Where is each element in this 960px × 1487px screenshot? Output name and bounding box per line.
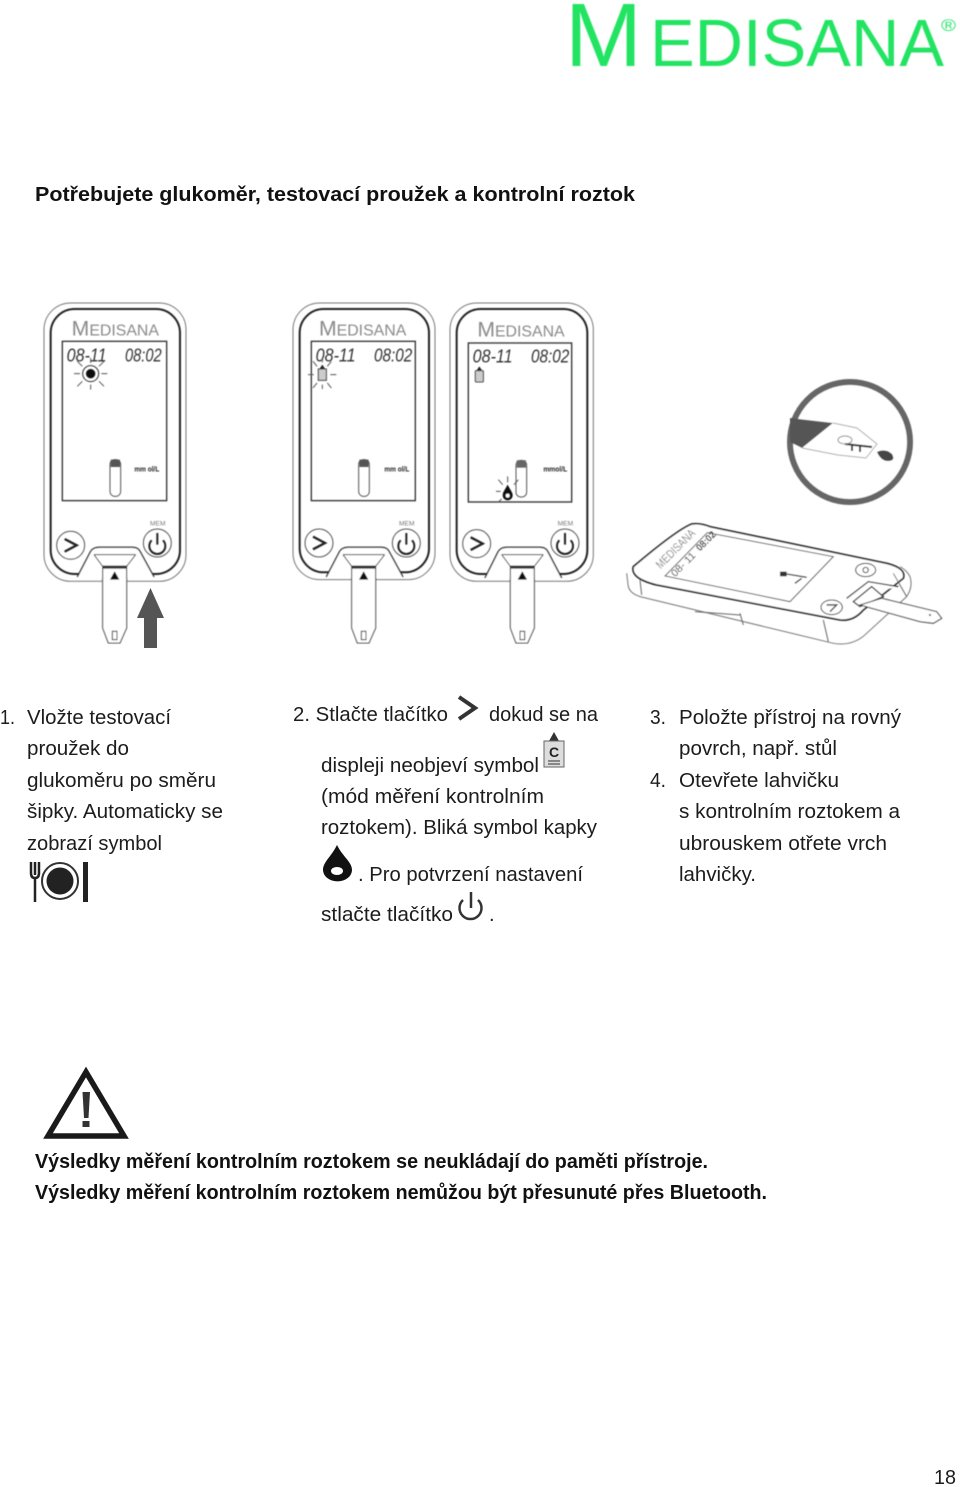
- illustration: meter 3 with strip: 08:02: [531, 346, 570, 367]
- arrow: insert direction: [137, 588, 164, 648]
- illustration: meter 2 with strip: MEM: [399, 521, 415, 528]
- step 1 text: Vložte testovací: [27, 707, 171, 729]
- step 2 text: . Pro potvrzení nastavení: [358, 864, 583, 886]
- step 3 and 4 text: Otevřete lahvičku: [679, 770, 839, 792]
- icon: drop: [323, 845, 352, 881]
- illustration: meter 2 with strip: MEDISANA: [319, 316, 407, 340]
- step 2 text: dokud se na: [489, 704, 599, 726]
- icon: control solution bottle: [544, 732, 564, 767]
- step 3 and 4 text: s kontrolním roztokem a: [679, 801, 901, 823]
- logo: Medisana: [565, 0, 957, 86]
- step 3 and 4 text: ubrouskem otřete vrch: [679, 833, 887, 855]
- step 1 text: šipky. Automaticky se: [27, 801, 223, 823]
- icon: plate with cutlery: [31, 862, 88, 902]
- warning text: Výsledky měření kontrolním roztokem nemůžou být přesunuté přes Bluetooth.: [35, 1181, 767, 1204]
- illustration: meter 1 with strip: 08-11: [67, 345, 107, 366]
- step 3 and 4 text: 3.: [650, 707, 666, 729]
- illustration: meter lying flat with strip: MEDISANA: [653, 526, 698, 571]
- icon: chevron button: [459, 697, 475, 719]
- illustration: meter 3 with strip: MEM: [558, 521, 573, 528]
- illustration: meter lying flat with strip: 08:02: [694, 529, 719, 554]
- icon: control solution bottle: C: [549, 744, 559, 760]
- step 1 text: [0, 707, 223, 855]
- icon: power: [460, 892, 482, 919]
- illustration: meter 1 with strip: [44, 303, 186, 643]
- illustration: meter 2 with strip: 08:02: [374, 345, 413, 366]
- illustration: meter 3 with strip: MEDISANA: [477, 317, 565, 341]
- step 1 text: zobrazí symbol: [27, 833, 162, 855]
- illustration: meter 2 with strip: 08-11: [316, 345, 356, 366]
- illustration: meter 2 with strip: mm ol/L: [384, 466, 410, 473]
- heading: Potřebujete glukoměr, testovací proužek a kontrolní roztok: [35, 183, 636, 206]
- illustration: magnified strip with drop: [790, 382, 910, 502]
- illustration: meter 3 with strip: 08-11: [473, 346, 513, 367]
- step 2 text: [293, 704, 599, 926]
- step 2 text: roztokem). Bliká symbol kapky: [321, 817, 597, 839]
- illustration: meter 1 with strip: 08:02: [125, 345, 162, 366]
- step 1 text: glukoměru po směru: [27, 770, 216, 792]
- step 2 text: 2. Stlačte tlačítko: [293, 704, 448, 726]
- illustration: meter 2 with strip: [293, 303, 435, 643]
- step 3 and 4 text: povrch, např. stůl: [679, 738, 837, 760]
- illustration: meter 1 with strip: MEDISANA: [72, 316, 159, 340]
- step 1 text: proužek do: [27, 738, 129, 760]
- illustration: meter 3 with strip: mmol/L: [543, 466, 568, 473]
- step 3 and 4 text: lahvičky.: [679, 864, 756, 886]
- step 3 and 4 text: [650, 707, 901, 886]
- step 2 text: stlačte tlačítko: [321, 904, 453, 926]
- warning text: [35, 1150, 767, 1204]
- illustration: meter 3 with strip: [450, 303, 593, 643]
- warning text: Výsledky měření kontrolním roztokem se neukládají do paměti přístroje.: [35, 1150, 708, 1173]
- step 2 text: .: [489, 904, 495, 926]
- illustration: meter lying flat with strip: 08- 11: [669, 550, 699, 579]
- step 3 and 4 text: Položte přístroj na rovný: [679, 707, 901, 729]
- illustration: meter 1 with strip: mm ol/L: [134, 466, 160, 473]
- illustration: meter 1 with strip: MEM: [150, 521, 166, 528]
- illustration: meter lying flat with strip: [627, 524, 942, 644]
- logo: Medisana: EDISANA: [650, 6, 944, 81]
- step 3 and 4 text: 4.: [650, 770, 666, 792]
- step 1 text: 1.: [0, 707, 15, 729]
- logo: Medisana: ®: [941, 16, 957, 35]
- icon: warning triangle: [48, 1072, 124, 1136]
- step 2 text: (mód měření kontrolním: [321, 786, 544, 808]
- step 2 text: displeji neobjeví symbol: [321, 755, 539, 777]
